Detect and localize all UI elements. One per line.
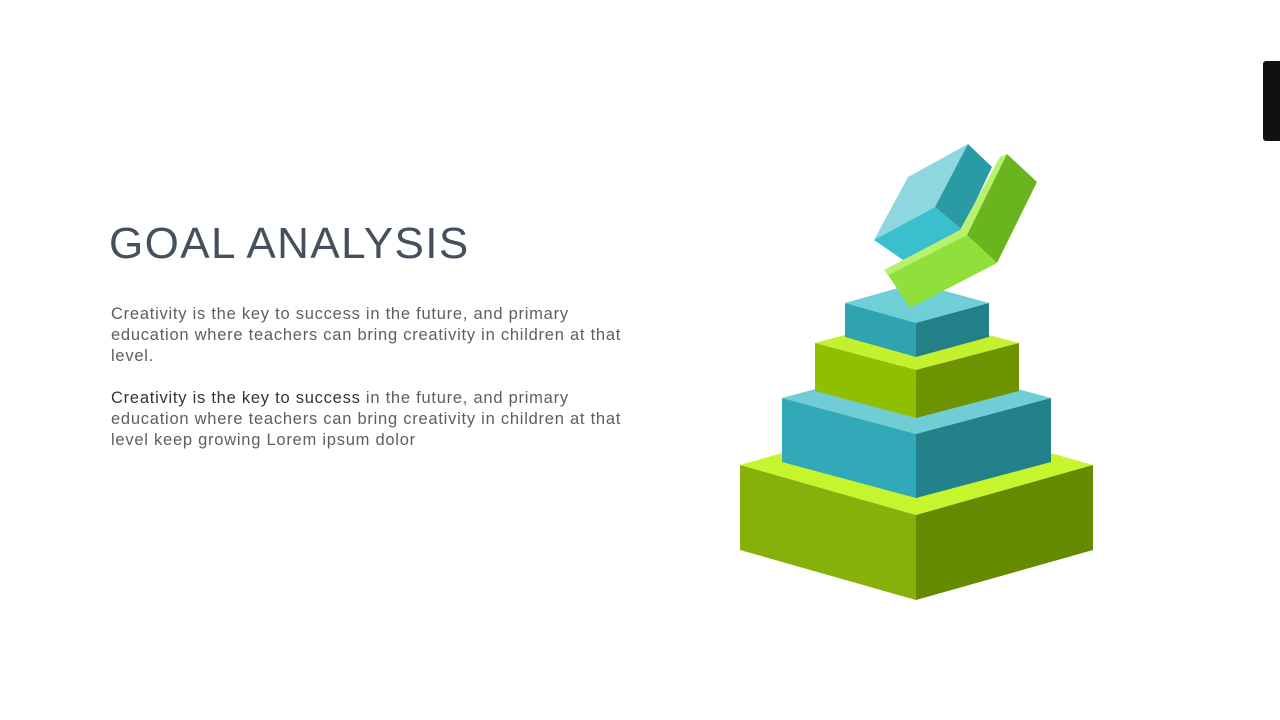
text block: paragraph 1: Creativity is the key to success in the future, and primary xyxy=(111,305,569,323)
icon: screenrec badge xyxy=(1263,61,1280,141)
tier 4 (top, blue) xyxy=(845,283,989,357)
text block: paragraph 2 xyxy=(111,389,621,449)
text block: paragraph 1: level. xyxy=(111,347,154,365)
text block: paragraph 2: level keep growing Lorem ipsum dolor xyxy=(111,431,416,449)
tier 3 (green) xyxy=(815,316,1019,418)
text block: paragraph 1 xyxy=(111,305,621,365)
text block: paragraph 2: education where teachers can bring creativity in children at that xyxy=(111,410,621,428)
tier 1 (bottom, green) xyxy=(740,415,1093,600)
tier 2 (blue) xyxy=(782,362,1051,498)
text block: paragraph 1: education where teachers can bring creativity in children at that xyxy=(111,326,621,344)
title: GOAL ANALYSIS xyxy=(109,219,470,268)
text block: paragraph 2: Creativity is the key to success in the future, and primary xyxy=(111,389,569,407)
floating green block xyxy=(884,154,1037,308)
floating blue cube xyxy=(874,144,992,260)
